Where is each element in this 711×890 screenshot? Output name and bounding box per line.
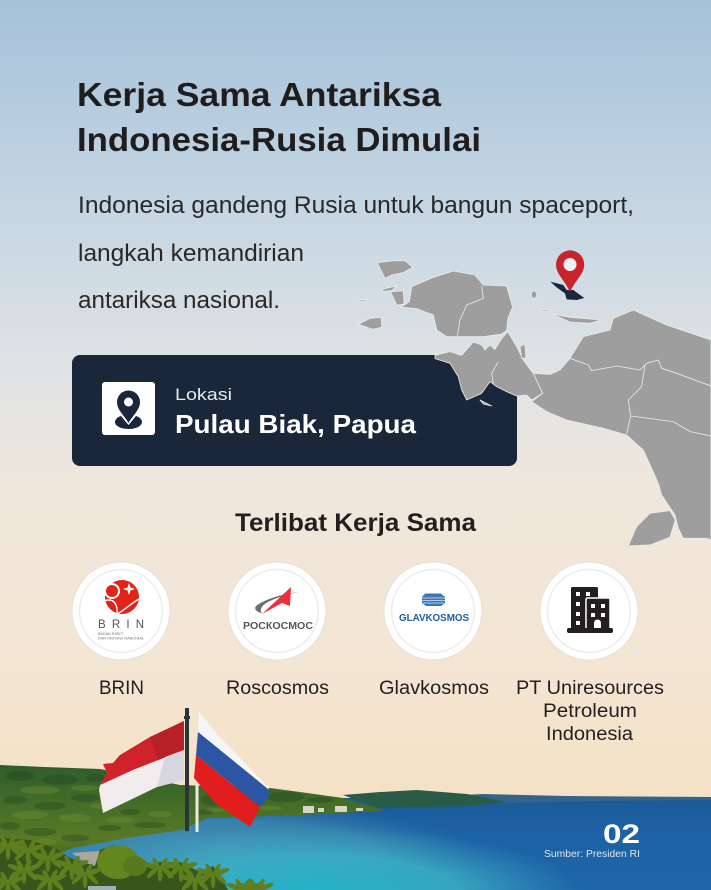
Indonesian flag pole xyxy=(184,708,190,831)
foreground palms xyxy=(0,835,274,890)
partner labels xyxy=(99,678,664,745)
partner labels: Roscosmos xyxy=(226,678,329,699)
panel: location xyxy=(72,355,517,466)
logo: Roscosmos xyxy=(228,562,326,660)
logo: BRIN: BRIN xyxy=(98,619,144,631)
map: southern island xyxy=(628,511,675,546)
sand strip xyxy=(72,851,125,870)
flags xyxy=(99,708,270,832)
subtitle text: Indonesia gandeng Rusia untuk bangun spaceport, xyxy=(78,192,634,219)
map of Papua xyxy=(358,261,711,546)
white cliffs xyxy=(303,806,363,813)
icon: office building xyxy=(540,562,638,660)
map: Bomberai region xyxy=(435,332,543,400)
logo: BRIN: BADAN RISET xyxy=(98,632,124,636)
background: sea and coast scene xyxy=(0,765,711,890)
map: bird's head region xyxy=(401,271,513,337)
logo: Glavkosmos: GLAVKOSMOS xyxy=(399,612,469,624)
subtitle text xyxy=(78,192,634,314)
Indonesian flag xyxy=(99,721,184,813)
partner labels: PT Uniresources xyxy=(516,678,664,699)
Russian flag pole xyxy=(196,777,198,832)
subtitle text: antariksa nasional. xyxy=(78,287,280,314)
logo: Glavkosmos xyxy=(384,562,482,660)
logo: Roscosmos: РОСКОСМОС xyxy=(243,620,313,632)
subtitle text: langkah kemandirian xyxy=(78,240,304,267)
logo: BRIN: DAN INOVASI NASIONAL xyxy=(98,636,144,640)
partner labels: BRIN xyxy=(99,678,144,699)
title: Kerja Sama Antariksa xyxy=(77,76,442,113)
icon: location pin xyxy=(102,382,155,435)
map: mainland Papua xyxy=(532,310,711,540)
map: small islands xyxy=(358,261,602,406)
partner labels: Indonesia xyxy=(546,724,633,745)
sea xyxy=(0,798,711,890)
map: Biak island xyxy=(550,282,584,300)
forested headland xyxy=(0,765,383,870)
map: province borders xyxy=(457,286,711,436)
title xyxy=(77,76,481,158)
partner labels: Glavkosmos xyxy=(379,678,489,699)
partner labels: Petroleum xyxy=(543,701,637,722)
location name: Pulau Biak, Papua xyxy=(175,409,417,439)
distant hills xyxy=(440,794,711,803)
location pin on Biak xyxy=(556,250,584,292)
heading: involved parties: Terlibat Kerja Sama xyxy=(235,509,477,537)
title: Indonesia-Rusia Dimulai xyxy=(77,121,481,158)
page number: 02 xyxy=(603,819,640,849)
location label: Lokasi xyxy=(175,385,232,404)
Russian flag xyxy=(194,712,270,827)
source note: Sumber: Presiden RI xyxy=(544,848,640,860)
logo: BRIN xyxy=(72,562,170,660)
